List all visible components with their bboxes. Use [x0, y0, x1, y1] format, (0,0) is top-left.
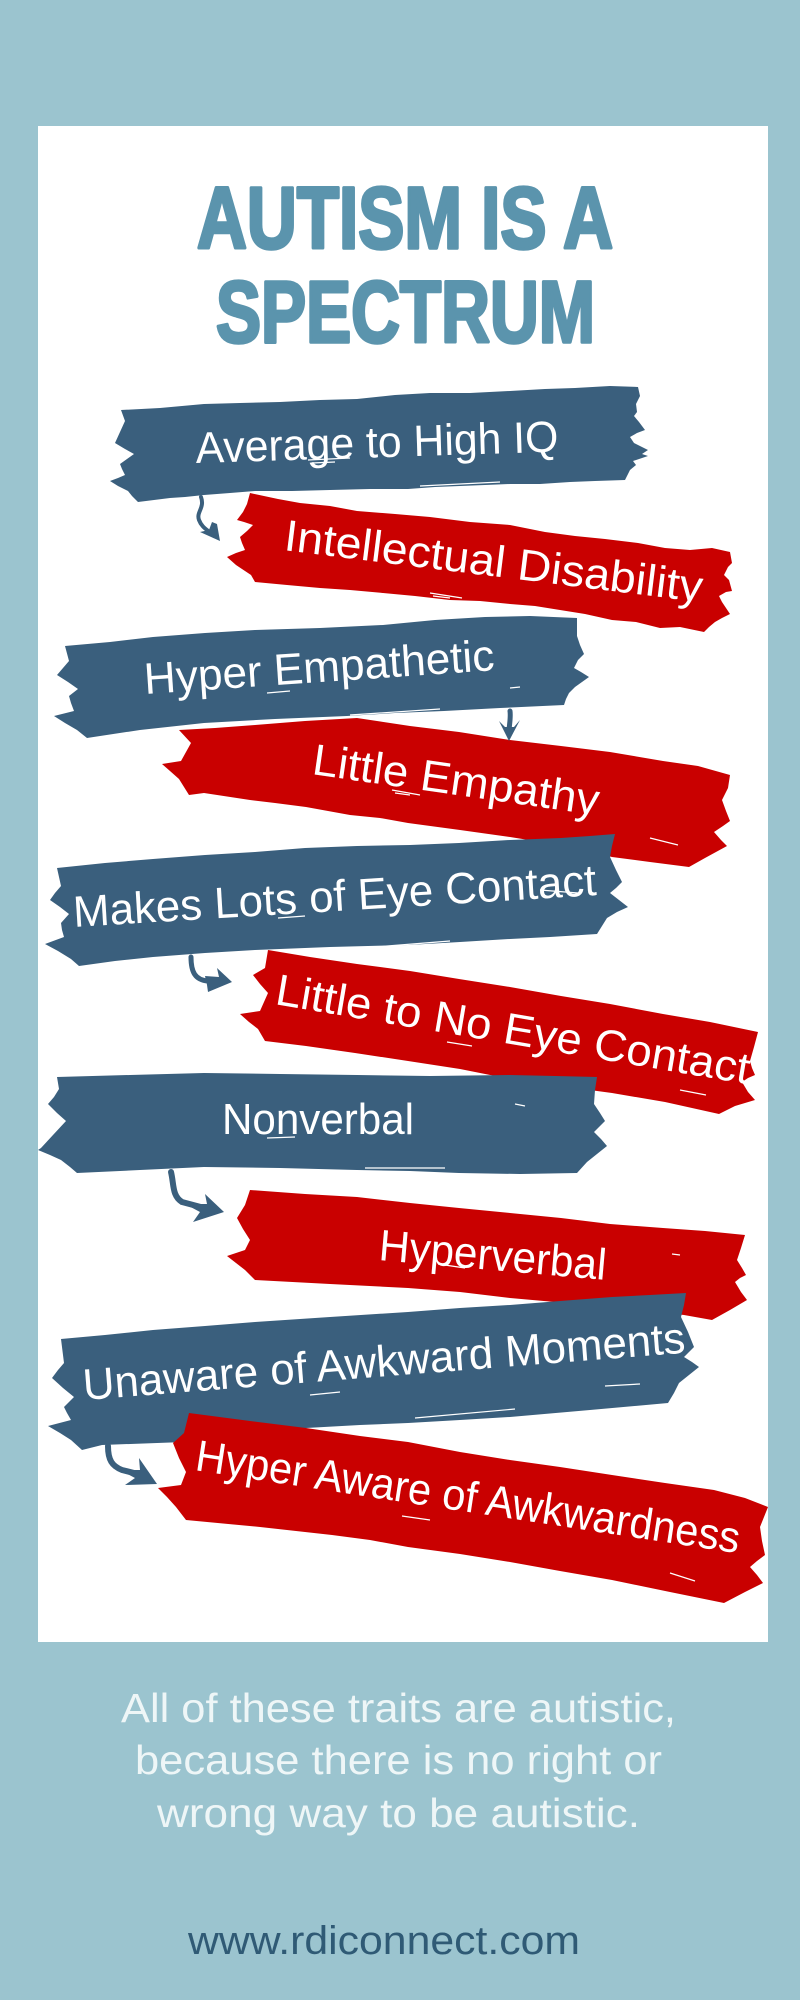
arrow: Hyper Empathetic to Little Empathy	[499, 711, 520, 741]
arrow: Nonverbal to Hyperverbal	[171, 1172, 224, 1222]
red brush: Little to No Eye Contact	[240, 950, 758, 1114]
blue brush: Unaware of Awkward Moments	[48, 1293, 699, 1450]
arrow: Average to High IQ to Intellectual Disability	[198, 497, 220, 541]
website url: www.rdiconnect.com	[187, 1919, 580, 1963]
blue brush: Nonverbal	[38, 1073, 607, 1174]
blue brush: Makes Lots of Eye Contact: Makes Lots of Eye Contact	[72, 856, 598, 937]
blue brush: Unaware of Awkward Moments: Unaware of Awkward Moments	[81, 1314, 687, 1410]
red brush: Hyper Aware of Awkwardness	[158, 1413, 768, 1603]
blue brush: Makes Lots of Eye Contact	[45, 834, 628, 966]
red brush: Hyper Aware of Awkwardness: Hyper Aware of Awkwardness	[192, 1431, 744, 1563]
blue brush: Hyper Empathetic	[54, 616, 589, 738]
red brush: Intellectual Disability: Intellectual Disability	[282, 511, 706, 612]
red brush: Hyperverbal	[227, 1190, 747, 1320]
arrow: Unaware of Awkward Moments to Hyper Aware of Awkwardness	[108, 1446, 157, 1485]
footer message: wrong way to be autistic.	[156, 1790, 640, 1836]
red brush: Hyperverbal: Hyperverbal	[377, 1221, 609, 1290]
footer message: because there is no right or	[135, 1737, 662, 1783]
blue brush: Hyper Empathetic: Hyper Empathetic	[142, 631, 496, 704]
panel: white card	[38, 126, 768, 1642]
title: SPECTRUM	[216, 264, 595, 361]
blue brush: Nonverbal: Nonverbal	[222, 1095, 414, 1144]
blue brush: Average to High IQ	[110, 386, 648, 502]
arrow: Makes Lots of Eye Contact to Little to No Eye Contact	[191, 957, 232, 992]
red brush: Little Empathy	[162, 718, 730, 867]
footer message: All of these traits are autistic,	[121, 1685, 676, 1731]
footer message	[121, 1685, 676, 1836]
red brush: Little to No Eye Contact: Little to No Eye Contact	[272, 966, 754, 1094]
title	[197, 170, 613, 361]
red brush: Little Empathy: Little Empathy	[310, 735, 603, 825]
blue brush: Average to High IQ: Average to High IQ	[195, 413, 559, 473]
title: AUTISM IS A	[197, 170, 613, 267]
red brush: Intellectual Disability	[227, 493, 732, 632]
